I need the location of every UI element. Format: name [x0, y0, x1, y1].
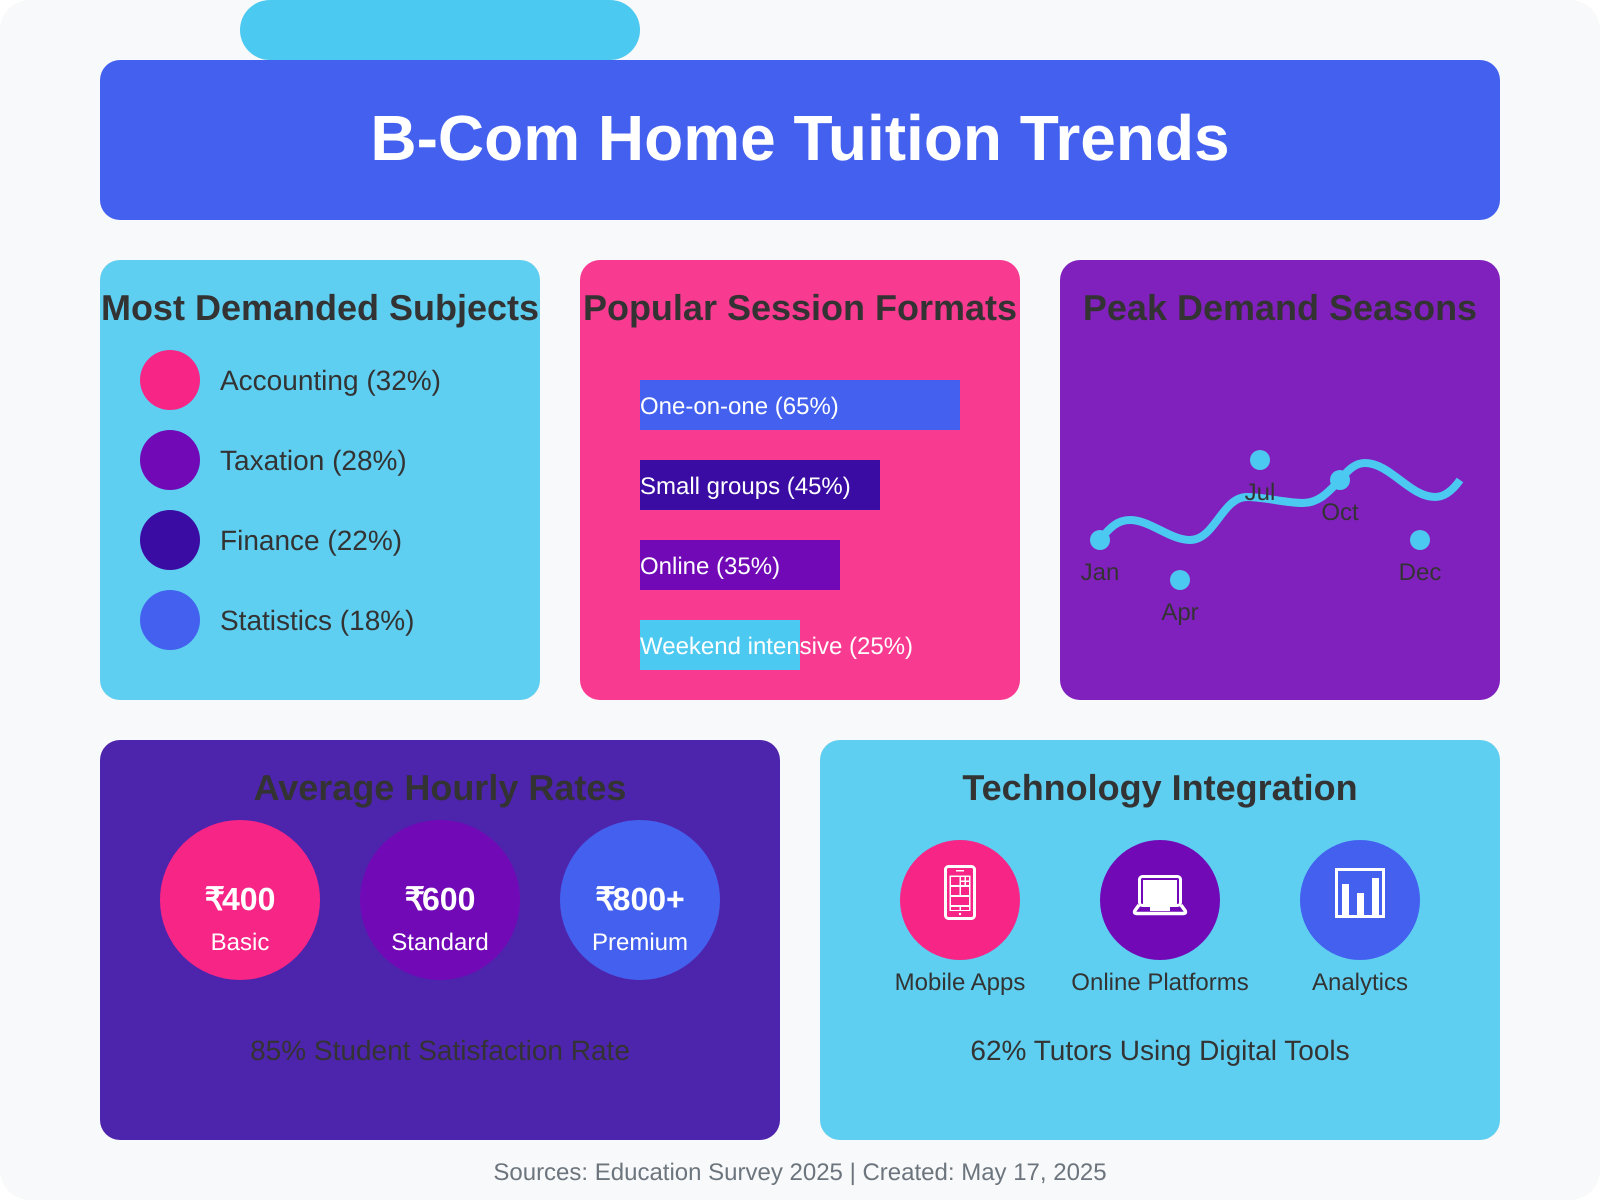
panel: peak demand seasons [1060, 260, 1500, 700]
point: Dec [1399, 530, 1441, 586]
rate: premium [560, 820, 720, 980]
label: mobile apps: Mobile Apps [895, 969, 1025, 996]
panel: average hourly rates [100, 740, 780, 1140]
rate: basic: Basic [211, 929, 269, 956]
title banner [100, 60, 1500, 220]
item: accounting: Accounting (32%) [220, 365, 441, 396]
digital tools statistic: 62% Tutors Using Digital Tools [970, 1035, 1350, 1066]
item: statistics: Statistics (18%) [220, 605, 414, 636]
rate: standard: Standard [391, 929, 489, 956]
bar: small groups: Small groups (45%) [640, 473, 851, 500]
item: taxation [140, 430, 407, 490]
point: Jan: Jan [1081, 559, 1119, 586]
panel: popular session formats [580, 260, 1020, 700]
bar: one-on-one [640, 380, 960, 430]
point: Jul: Jul [1245, 479, 1275, 506]
rate: standard: ₹600 [405, 881, 475, 917]
icon: mobile apps [900, 840, 1020, 960]
title: B-Com Home Tuition Trends [370, 102, 1230, 174]
icon: online platforms [1100, 840, 1220, 960]
heading: rates: Average Hourly Rates [254, 767, 626, 808]
footer sources: Sources: Education Survey 2025 | Created: May 17, 2025 [493, 1159, 1107, 1186]
satisfaction statistic: 85% Student Satisfaction Rate [250, 1035, 630, 1066]
rate: basic [160, 820, 320, 980]
point: Apr: Apr [1161, 599, 1199, 626]
item: statistics [140, 590, 414, 650]
point: Oct [1321, 470, 1359, 526]
bar: weekend intensive: Weekend intensive (25%) [640, 633, 913, 660]
bar: small groups [640, 460, 880, 510]
rate: premium: ₹800+ [595, 881, 685, 917]
bar: weekend intensive [640, 620, 913, 670]
icon: analytics [1300, 840, 1420, 960]
bar: online [640, 540, 840, 590]
heading: seasons: Peak Demand Seasons [1083, 287, 1477, 328]
bar: one-on-one: One-on-one (65%) [640, 393, 839, 420]
item: taxation: Taxation (28%) [220, 445, 407, 476]
heading: formats: Popular Session Formats [583, 287, 1017, 328]
item: finance [140, 510, 402, 570]
point: Oct: Oct [1321, 499, 1359, 526]
rate: premium: Premium [592, 929, 688, 956]
item: finance: Finance (22%) [220, 525, 402, 556]
heading: subjects: Most Demanded Subjects [101, 287, 539, 328]
decorative pill above header [240, 0, 640, 60]
point: Jul [1245, 450, 1275, 506]
panel: most demanded subjects [100, 260, 540, 700]
panel: technology integration [820, 740, 1500, 1140]
point: Apr [1161, 570, 1199, 626]
item: accounting [140, 350, 441, 410]
heading: technology: Technology Integration [962, 767, 1358, 808]
label: analytics: Analytics [1312, 969, 1408, 996]
point: Jan [1081, 530, 1119, 586]
rate: standard [360, 820, 520, 980]
label: online platforms: Online Platforms [1071, 969, 1249, 996]
point: Dec: Dec [1399, 559, 1441, 586]
rate: basic: ₹400 [205, 881, 275, 917]
bar: online: Online (35%) [640, 553, 780, 580]
line chart: demand curve [1100, 463, 1460, 540]
